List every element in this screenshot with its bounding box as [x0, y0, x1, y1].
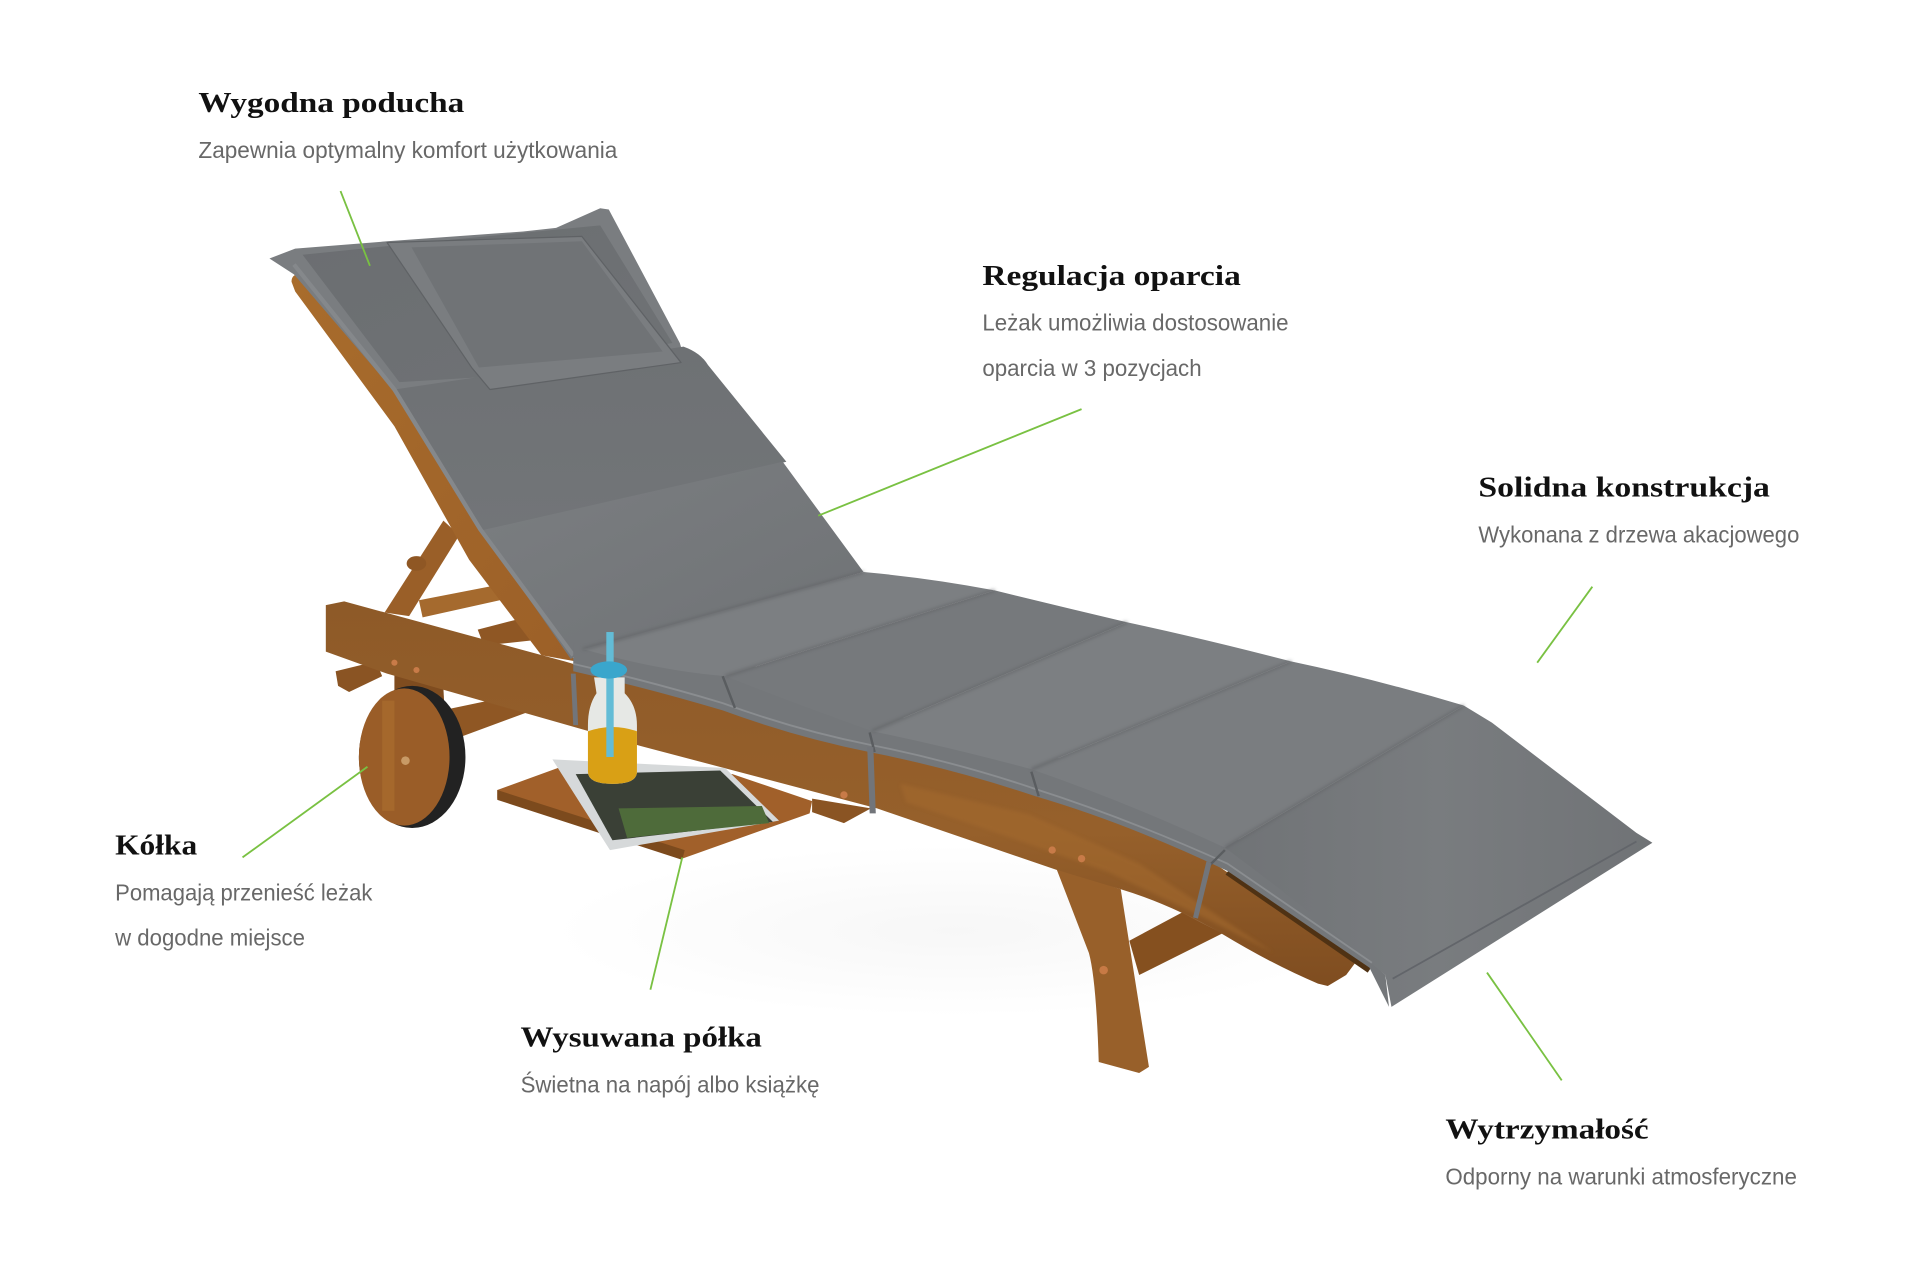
lounger illustration: [269, 208, 1652, 1073]
callout line: Solidna konstrukcja: [1537, 587, 1592, 663]
front piping: [573, 664, 1372, 963]
description: Pomagają przenieść leżak: [115, 879, 373, 905]
upper backrest section: [394, 347, 786, 532]
lower backrest section: [481, 462, 864, 659]
callout: Kółka: [114, 830, 373, 951]
description: w dogodne miejsce: [114, 925, 305, 951]
callout line: Kółka: [243, 767, 367, 857]
seat section 2: [725, 590, 1127, 731]
callout: Regulacja oparcia: [982, 261, 1289, 381]
seat section 1: [583, 572, 995, 676]
leg bolt: [1099, 966, 1108, 974]
description: Zapewnia optymalny komfort użytkowania: [198, 137, 618, 163]
heading: Regulacja oparcia: [982, 261, 1241, 292]
cushion straps: [571, 674, 1211, 919]
callout line: Wytrzymałość: [1487, 973, 1562, 1080]
extending shelf: [497, 766, 871, 860]
front seam ties: [723, 676, 1225, 865]
seat section 3: [872, 622, 1291, 769]
heading: Wytrzymałość: [1445, 1115, 1649, 1146]
backrest wooden frame: [292, 274, 576, 661]
wheel: [359, 686, 465, 828]
rear frame of wheel axle: [394, 671, 539, 737]
rail bolts: [391, 660, 1085, 862]
rail dark gap under cushion: [1227, 872, 1369, 970]
heading: Kółka: [115, 830, 197, 861]
callout: Wygodna poducha: [198, 88, 618, 163]
description: [982, 310, 1289, 381]
heading: Solidna konstrukcja: [1478, 473, 1770, 504]
backrest trim: [294, 265, 573, 655]
footrest section: [1225, 706, 1652, 1007]
bottle: [588, 632, 637, 784]
description: Wykonana z drzewa akacjowego: [1478, 522, 1799, 548]
callout line: Wygodna poducha: [341, 191, 370, 266]
callout: Solidna konstrukcja: [1478, 473, 1799, 548]
callout line: Regulacja oparcia: [818, 409, 1082, 516]
description: oparcia w 3 pozycjach: [982, 355, 1202, 381]
section seams: [583, 572, 1464, 848]
rail grain highlight: [900, 784, 1274, 953]
heading: Wysuwana półka: [521, 1023, 762, 1054]
description: Świetna na napój albo książkę: [521, 1072, 819, 1098]
front leg: [1056, 867, 1222, 1073]
description: Odporny na warunki atmosferyczne: [1445, 1163, 1797, 1189]
cushion: [269, 208, 1652, 1007]
back support strut: [336, 521, 541, 692]
head section: [269, 208, 683, 394]
callout: Wytrzymałość: [1445, 1115, 1797, 1189]
seat front edge: [573, 643, 1389, 1007]
callout: Wysuwana półka: [521, 1023, 819, 1098]
pillow: [387, 236, 681, 390]
floor shadow: [551, 845, 1360, 1017]
description: [114, 879, 373, 951]
magazine: [552, 759, 779, 850]
heading: Wygodna poducha: [198, 88, 464, 119]
footrest flange: [1393, 841, 1636, 979]
seat section 4: [1031, 661, 1464, 848]
callout line: Wysuwana półka: [650, 857, 682, 990]
description: Leżak umożliwia dostosowanie: [982, 310, 1289, 336]
side rail: [326, 601, 1357, 986]
